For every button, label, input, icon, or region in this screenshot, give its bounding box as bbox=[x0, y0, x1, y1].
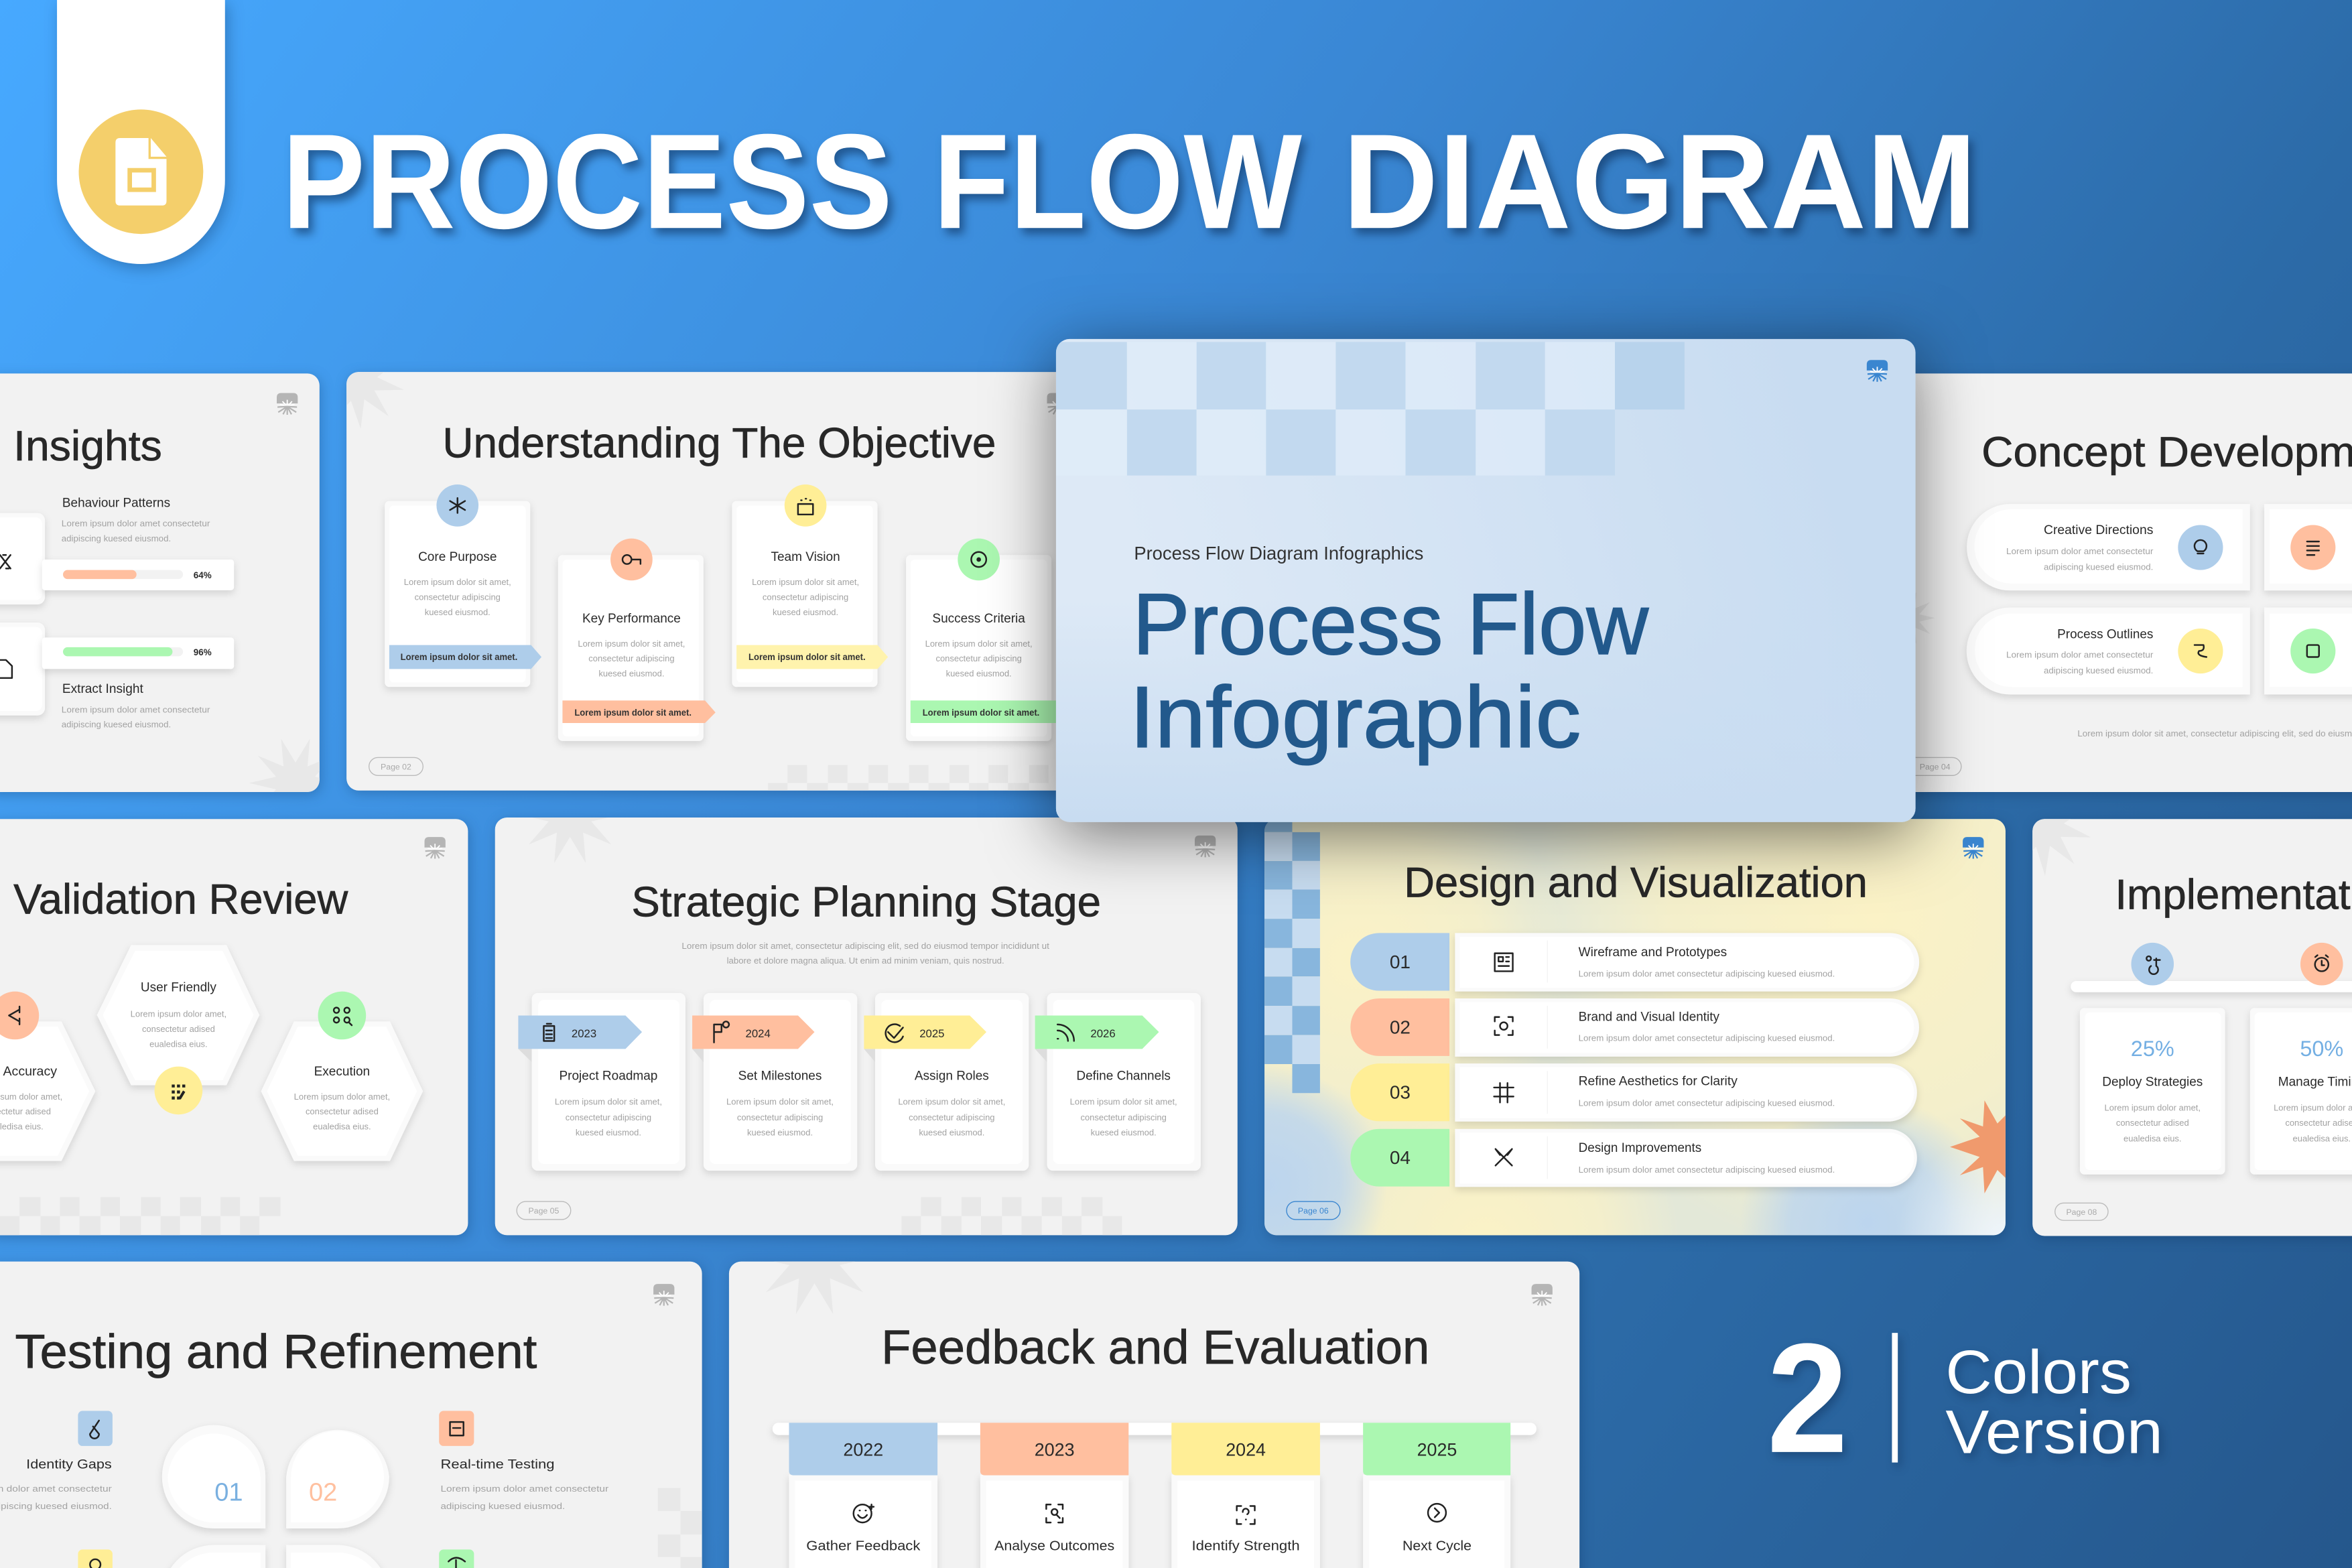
card: Key Performance: Lorem ipsum dolor sit amet. bbox=[574, 707, 692, 718]
page pill bbox=[517, 1201, 571, 1220]
hexagon: Execution: Lorem ipsum dolor amet, bbox=[294, 1092, 390, 1102]
item: Identity Gaps: Identity Gaps bbox=[26, 1458, 112, 1472]
circle icon: blue bbox=[2131, 943, 2174, 985]
card: Core Purpose: Lorem ipsum dolor sit amet. bbox=[401, 651, 517, 662]
card: 2026 Define Channels: kuesed eiusmod. bbox=[1091, 1128, 1157, 1138]
checker column bbox=[1264, 819, 1320, 1093]
card: Manage Timing: eualedisa eius. bbox=[2293, 1134, 2351, 1144]
card: 2026 Define Channels: 2026 bbox=[1090, 1027, 1116, 1040]
card: Deploy Strategies bbox=[2080, 1008, 2225, 1175]
row 01 bbox=[1350, 933, 1919, 992]
page pill: Page 02 bbox=[381, 762, 411, 771]
cover title bbox=[1130, 575, 1649, 766]
row 04: Lorem ipsum dolor amet consectetur adipiscing kuesed eiusmod. bbox=[1579, 1165, 1835, 1175]
panel: Concept Development slide bbox=[1881, 373, 2352, 792]
card: Key Performance: kuesed eiusmod. bbox=[598, 669, 664, 679]
card: Process Outlines: adipiscing kuesed eiusmod. bbox=[2044, 665, 2153, 675]
card: Deploy Strategies: eualedisa eius. bbox=[2124, 1134, 2182, 1144]
caption bbox=[1945, 1338, 2163, 1467]
card: Creative Directions: Creative Directions bbox=[2044, 523, 2153, 537]
card: Creative Directions: Lorem ipsum dolor amet consectetur bbox=[2006, 546, 2154, 556]
logo bbox=[425, 837, 446, 859]
card: Success Criteria: Success Criteria bbox=[932, 612, 1025, 626]
icon tile: green bbox=[439, 1549, 474, 1568]
card: Success Criteria bbox=[906, 539, 1067, 741]
card: Core Purpose: Core Purpose bbox=[418, 550, 497, 564]
hexagon: Execution bbox=[261, 992, 423, 1161]
panel: Process Flow cover slide bbox=[1056, 339, 1916, 822]
column 2022 Gather Feedback: Gather Feedback bbox=[806, 1539, 921, 1554]
column 2024 Identify Strength: Identify Strength bbox=[1192, 1539, 1300, 1554]
card: Success Criteria: consectetur adipiscing bbox=[935, 653, 1022, 663]
hexagon: User Friendly: consectetur adised bbox=[142, 1024, 215, 1034]
item: Behaviour Patterns bbox=[0, 497, 234, 604]
subtitle bbox=[681, 941, 1049, 966]
page pill: Page 05 bbox=[529, 1206, 560, 1216]
row 01: Wireframe and Prototypes bbox=[1579, 945, 1727, 960]
circle icon: peach bbox=[2300, 943, 2343, 985]
column 2025 Next Cycle: 2025 bbox=[1417, 1439, 1457, 1459]
card: second top card bbox=[2264, 504, 2352, 590]
page pill: Page 08 bbox=[2066, 1207, 2097, 1217]
petal 02: 02 bbox=[309, 1479, 337, 1507]
heading: Feedback and Evaluation bbox=[881, 1321, 1429, 1374]
cover title: Infographic bbox=[1130, 668, 1581, 766]
panel: Strategic Planning Stage slide bbox=[495, 766, 1238, 1235]
row 02: 02 bbox=[1390, 1017, 1411, 1037]
row 04: 04 bbox=[1390, 1147, 1411, 1168]
card: 2024 Set Milestones: 2024 bbox=[746, 1027, 771, 1040]
card: Key Performance: Lorem ipsum dolor sit amet, bbox=[578, 639, 685, 649]
card: Key Performance: consectetur adipiscing bbox=[588, 653, 675, 663]
logo bbox=[1195, 836, 1216, 857]
column 2025 Next Cycle: Next Cycle bbox=[1402, 1539, 1472, 1554]
column 2022 Gather Feedback bbox=[789, 1423, 937, 1568]
card: 2025 Assign Roles: 2025 bbox=[919, 1027, 945, 1040]
card: second bottom card bbox=[2264, 608, 2352, 694]
item: Behaviour Patterns: adipiscing kuesed eiusmod. bbox=[62, 533, 171, 543]
logo bbox=[277, 393, 298, 415]
banner tab with document icon bbox=[57, 0, 225, 264]
column 2025 Next Cycle bbox=[1363, 1423, 1510, 1568]
card: 2026 Define Channels: Define Channels bbox=[1076, 1069, 1171, 1084]
divider bbox=[1892, 1333, 1898, 1463]
hexagon: User Friendly bbox=[97, 945, 259, 1114]
card: 2025 Assign Roles: consectetur adipiscing bbox=[909, 1112, 995, 1122]
checker pattern bbox=[658, 1488, 702, 1568]
timeline bar bbox=[2071, 981, 2352, 992]
item: Extract Insight: Lorem ipsum dolor amet consectetur bbox=[62, 704, 210, 714]
decorative star bbox=[346, 372, 403, 428]
card: Key Performance: Key Performance bbox=[582, 612, 681, 626]
item: Behaviour Patterns: 64% bbox=[194, 570, 212, 580]
card: 2024 Set Milestones: Set Milestones bbox=[738, 1069, 822, 1084]
card: Team Vision: consectetur adipiscing bbox=[763, 592, 848, 602]
page pill bbox=[2055, 1203, 2108, 1220]
card: 2023 Project Roadmap: Project Roadmap bbox=[559, 1069, 657, 1084]
card: Deploy Strategies: Deploy Strategies bbox=[2102, 1075, 2203, 1090]
card: 2026 Define Channels: consectetur adipiscing bbox=[1080, 1112, 1167, 1122]
item: Real-time Testing: Lorem ipsum dolor amet consectetur bbox=[440, 1484, 609, 1494]
card: Manage Timing: 50% bbox=[2300, 1037, 2343, 1061]
row 01: Lorem ipsum dolor amet consectetur adipiscing kuesed eiusmod. bbox=[1579, 968, 1835, 978]
page pill: Page 04 bbox=[1920, 762, 1951, 771]
gradient wash bbox=[1147, 570, 2220, 1440]
heading: Testing and Refinement bbox=[15, 1325, 537, 1379]
card: Success Criteria: Lorem ipsum dolor sit amet, bbox=[925, 639, 1033, 649]
item: Real-time Testing: Real-time Testing bbox=[440, 1458, 555, 1472]
petal 01: 01 bbox=[214, 1479, 243, 1507]
page pill bbox=[1287, 1201, 1340, 1220]
decorative star bbox=[1881, 592, 1935, 644]
petal 02 bbox=[286, 1430, 389, 1528]
item: Behaviour Patterns: Behaviour Patterns bbox=[62, 497, 170, 511]
heading: Insights: Insights bbox=[13, 423, 162, 470]
hexagon: Accuracy: Accuracy bbox=[3, 1065, 58, 1079]
hexagon: Execution: eualedisa eius. bbox=[313, 1122, 371, 1132]
row 03 bbox=[1350, 1063, 1917, 1122]
logo bbox=[653, 1284, 674, 1306]
timeline bar bbox=[773, 1423, 1537, 1435]
card: 2023 Project Roadmap: Lorem ipsum dolor sit amet, bbox=[555, 1097, 662, 1107]
card: Success Criteria: kuesed eiusmod. bbox=[946, 669, 1012, 679]
panel: Validation Review slide bbox=[0, 819, 468, 1235]
caption: Colors bbox=[1945, 1338, 2132, 1407]
logo bbox=[1963, 837, 1983, 859]
subtitle: Lorem ipsum dolor sit amet, consectetur adipiscing elit, sed do eiusmod tempor incididunt ut bbox=[681, 941, 1049, 951]
icon: yellow circle bbox=[79, 109, 203, 234]
column 2023 Analyse Outcomes: 2023 bbox=[1035, 1439, 1075, 1459]
big number 2: 2 bbox=[1767, 1311, 1848, 1486]
item: Identity Gaps bbox=[0, 1411, 113, 1511]
card: 2023 Project Roadmap bbox=[518, 993, 685, 1171]
title bbox=[282, 106, 1977, 257]
title: PROCESS bbox=[282, 106, 893, 257]
panel: Implementation slide bbox=[1980, 765, 2352, 1236]
card: Team Vision: kuesed eiusmod. bbox=[773, 607, 838, 617]
row 02: Lorem ipsum dolor amet consectetur adipiscing kuesed eiusmod. bbox=[1579, 1033, 1835, 1043]
row 03: Refine Aesthetics for Clarity bbox=[1579, 1075, 1738, 1089]
hexagon: User Friendly: Lorem ipsum dolor amet, bbox=[131, 1009, 226, 1019]
row 04 bbox=[1350, 1129, 1917, 1187]
card: Team Vision: Lorem ipsum dolor sit amet, bbox=[752, 577, 859, 587]
card: 2023 Project Roadmap: kuesed eiusmod. bbox=[576, 1128, 641, 1138]
column 2024 Identify Strength bbox=[1171, 1423, 1320, 1568]
card: Core Purpose: Lorem ipsum dolor sit amet, bbox=[404, 577, 511, 587]
checker pattern bbox=[0, 1197, 281, 1235]
card: Key Performance bbox=[558, 539, 716, 741]
card: Core Purpose bbox=[385, 484, 541, 687]
petal 04 bbox=[286, 1545, 389, 1568]
row 02: Brand and Visual Identity bbox=[1579, 1010, 1720, 1024]
hexagon: Execution: Execution bbox=[314, 1065, 370, 1079]
icon: document bbox=[115, 138, 166, 206]
petal 01 bbox=[162, 1425, 265, 1528]
star decoration bbox=[1950, 1100, 2008, 1193]
card: Team Vision: Lorem ipsum dolor sit amet. bbox=[748, 651, 866, 662]
card: 2024 Set Milestones bbox=[692, 993, 857, 1171]
item: Extract Insight: Extract Insight bbox=[62, 682, 143, 696]
panel: Understanding The Objective slide bbox=[342, 370, 1056, 799]
logo bbox=[1047, 393, 1056, 415]
subtitle: Process Flow Diagram Infographics bbox=[1134, 543, 1423, 564]
card: Deploy Strategies: consectetur adised bbox=[2116, 1118, 2189, 1128]
item: Extract Insight: 96% bbox=[194, 647, 212, 657]
item: Extract Insight: adipiscing kuesed eiusmod. bbox=[62, 720, 171, 730]
heading: Design and Visualization bbox=[1404, 860, 1868, 907]
heading: Understanding The Objective bbox=[442, 420, 996, 467]
card: 2025 Assign Roles: Assign Roles bbox=[915, 1069, 989, 1084]
card: Team Vision bbox=[732, 484, 888, 687]
panel: Feedback and Evaluation slide bbox=[729, 1200, 1579, 1568]
column 2023 Analyse Outcomes bbox=[980, 1423, 1128, 1568]
decorative star bbox=[1980, 765, 2103, 885]
card: Core Purpose: kuesed eiusmod. bbox=[425, 607, 491, 617]
footnote: Lorem ipsum dolor sit amet, consectetur adipiscing elit, sed do eiusm bbox=[2077, 728, 2352, 738]
card: Creative Directions: adipiscing kuesed eiusmod. bbox=[2044, 562, 2153, 572]
card: 2026 Define Channels: Lorem ipsum dolor sit amet, bbox=[1070, 1097, 1177, 1107]
panel: Design and Visualization slide bbox=[1147, 570, 2220, 1440]
hexagon: Accuracy bbox=[0, 992, 95, 1161]
row 01: 01 bbox=[1390, 952, 1411, 972]
item: Behaviour Patterns: Lorem ipsum dolor amet consectetur bbox=[62, 519, 210, 529]
cover title: Process Flow bbox=[1132, 575, 1649, 673]
card: Process Outlines bbox=[1967, 608, 2250, 694]
logo bbox=[1532, 1284, 1553, 1306]
hexagon: Execution: consectetur adised bbox=[306, 1106, 379, 1116]
card: Deploy Strategies: Lorem ipsum dolor amet, bbox=[2105, 1103, 2201, 1113]
card: Success Criteria: Lorem ipsum dolor sit amet. bbox=[923, 707, 1039, 718]
card: Core Purpose: consectetur adipiscing bbox=[415, 592, 501, 602]
column 2024 Identify Strength: 2024 bbox=[1226, 1439, 1266, 1459]
panel: Testing and Refinement slide bbox=[0, 1262, 702, 1568]
card: Manage Timing bbox=[2250, 1008, 2352, 1175]
card: Deploy Strategies: 25% bbox=[2131, 1037, 2174, 1061]
panel: Insights slide bbox=[0, 373, 342, 828]
card: Process Outlines: Lorem ipsum dolor amet consectetur bbox=[2006, 650, 2154, 660]
checker pattern bbox=[1056, 342, 1685, 476]
decorative star bbox=[519, 766, 621, 863]
heading: Strategic Planning Stage bbox=[631, 879, 1101, 926]
item: Extract Insight bbox=[0, 623, 234, 730]
title: DIAGRAM bbox=[1342, 106, 1977, 257]
card: 2026 Define Channels bbox=[1035, 993, 1201, 1171]
page pill bbox=[369, 757, 423, 775]
checker pattern bbox=[768, 765, 1049, 791]
caption: Version bbox=[1945, 1398, 2163, 1467]
item: Real-time Testing bbox=[439, 1411, 609, 1511]
page pill: Page 06 bbox=[1298, 1206, 1329, 1216]
card: 2023 Project Roadmap: consectetur adipiscing bbox=[566, 1112, 651, 1122]
version badge bbox=[1767, 1311, 2163, 1486]
card: Process Outlines: Process Outlines bbox=[2057, 627, 2153, 641]
row 04: Design Improvements bbox=[1579, 1141, 1701, 1155]
row 03: 03 bbox=[1390, 1082, 1411, 1103]
card: Team Vision: Team Vision bbox=[771, 550, 840, 564]
page pill bbox=[1905, 757, 1961, 775]
column 2022 Gather Feedback: 2022 bbox=[843, 1439, 883, 1459]
title: FLOW bbox=[933, 106, 1302, 257]
card: Creative Directions bbox=[1967, 504, 2250, 590]
hexagon: User Friendly: eualedisa eius. bbox=[149, 1039, 208, 1049]
card: 2024 Set Milestones: Lorem ipsum dolor sit amet, bbox=[726, 1097, 834, 1107]
logo bbox=[1867, 360, 1888, 382]
subtitle: labore et dolore magna aliqua. Ut enim ad minim veniam, quis nostrud. bbox=[727, 956, 1004, 966]
row 03: Lorem ipsum dolor amet consectetur adipiscing kuesed eiusmod. bbox=[1579, 1098, 1835, 1108]
item: Real-time Testing: adipiscing kuesed eiusmod. bbox=[440, 1501, 565, 1511]
card: 2024 Set Milestones: kuesed eiusmod. bbox=[747, 1128, 813, 1138]
petal 03 bbox=[162, 1545, 265, 1568]
card: 2025 Assign Roles bbox=[864, 993, 1029, 1171]
card: 2023 Project Roadmap: 2023 bbox=[572, 1027, 596, 1040]
card: 2025 Assign Roles: kuesed eiusmod. bbox=[919, 1128, 984, 1138]
card: 2025 Assign Roles: Lorem ipsum dolor sit amet, bbox=[898, 1097, 1005, 1107]
row 02 bbox=[1350, 998, 1919, 1057]
decorative star bbox=[251, 740, 320, 792]
hexagon: User Friendly: User Friendly bbox=[141, 981, 216, 995]
card: 2024 Set Milestones: consectetur adipiscing bbox=[737, 1112, 823, 1122]
heading: Validation Review bbox=[13, 876, 348, 923]
checker pattern bbox=[901, 1197, 1122, 1235]
decorative star bbox=[755, 1200, 874, 1314]
column 2023 Analyse Outcomes: Analyse Outcomes bbox=[994, 1539, 1114, 1554]
icon tile: yellow bbox=[78, 1549, 113, 1568]
